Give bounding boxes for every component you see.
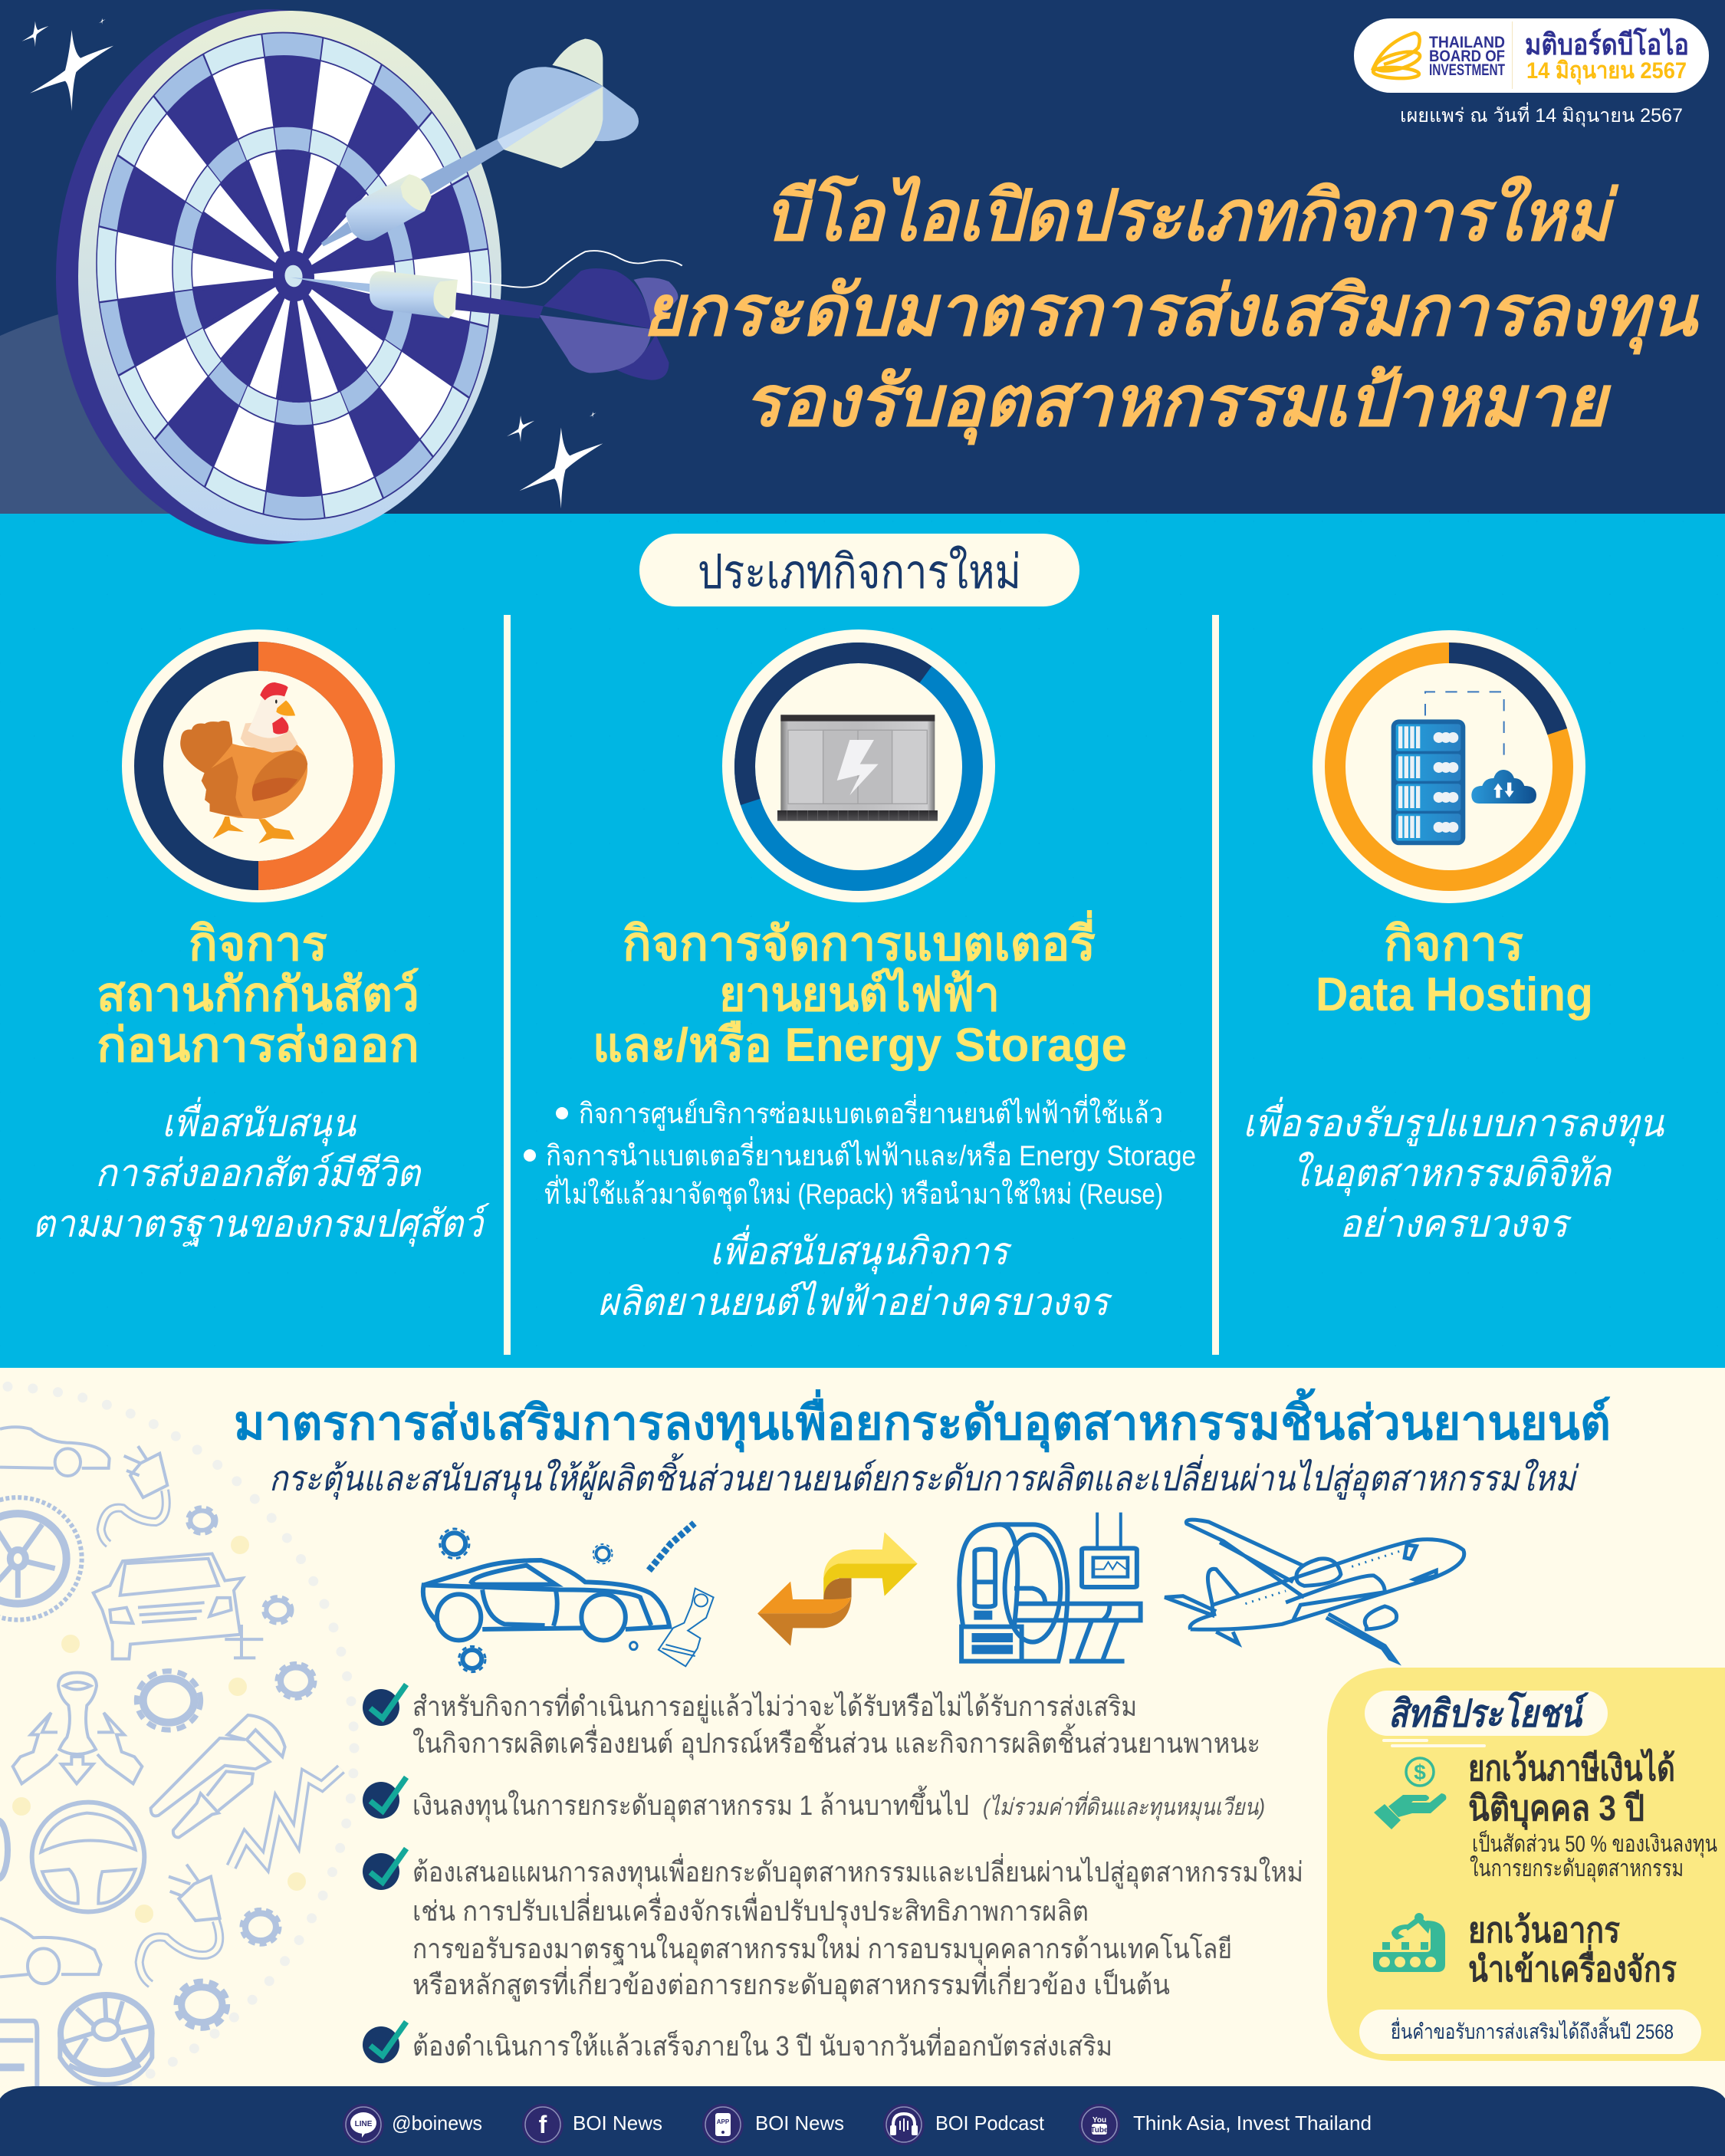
heading: data hosting: [1316, 918, 1593, 1021]
text: data hosting purpose: ในอุตสาหกรรมดิจิทัล: [1292, 1152, 1612, 1197]
social: podcast: [883, 2104, 1045, 2145]
text: animal quarantine purpose: การส่งออกสัตว์มีชีวิต: [95, 1152, 422, 1195]
text: battery purpose: เพื่อสนับสนุนกิจการ: [710, 1224, 1012, 1275]
text: income tax exemption: [1468, 1748, 1717, 1883]
social: LINE: [343, 2104, 482, 2145]
panel: new business types background: [0, 514, 1725, 1368]
icon: check mark: [363, 2022, 406, 2063]
text: animal quarantine purpose: เพื่อสนับสนุน: [162, 1096, 357, 1147]
heading: data hosting: กิจการ: [1384, 918, 1523, 971]
gears: [190, 1510, 213, 1530]
text: BOI resolution title: มติบอร์ดบีโอไอ: [1525, 27, 1689, 61]
icon: lower dart: [291, 251, 682, 380]
icon: check mark: [363, 1777, 406, 1819]
social: app: APP: [717, 2118, 730, 2125]
heading: data hosting: Data Hosting: [1316, 968, 1593, 1021]
social: YouTube: [1079, 2104, 1372, 2145]
illustration: dartboard: [56, 9, 501, 544]
text: battery purpose: ผลิตยานยนต์ไฟฟ้าอย่างครบวงจร: [598, 1280, 1112, 1323]
text: income tax exemption: ยกเว้นภาษีเงินได้: [1468, 1748, 1675, 1788]
text: battery activities: [524, 1093, 1196, 1211]
top car: [0, 1427, 110, 1468]
lower car: [0, 1918, 101, 1977]
plug 2: [169, 1865, 220, 1921]
item: minimum investment: [363, 1777, 1265, 1822]
tire: [0, 1497, 82, 1620]
icon: chicken in ring: [122, 629, 395, 902]
heading pill: benefits: [1365, 1691, 1608, 1747]
item: upgrade plan: การขอรับรองมาตรฐานในอุตสาหกรรมใหม่ การอบรมบุคคลากรด้านเทคโนโลยี: [412, 1933, 1232, 1966]
text: resolution date: 14 มิถุนายน 2567: [1526, 58, 1687, 85]
heading: EV battery management: และ/หรือ Energy Storage: [593, 1019, 1127, 1072]
item: existing businesses: [363, 1684, 1260, 1760]
text: data hosting purpose: อย่างครบวงจร: [1339, 1202, 1572, 1245]
icon: upper dart: [321, 38, 639, 246]
social: LINE: @boinews: [392, 2112, 482, 2135]
social: YouTube: Think Asia, Invest Thailand: [1133, 2112, 1372, 2135]
icon: robot arm conveyor: [1373, 1913, 1445, 1972]
checklist: eligibility conditions: [363, 1684, 1303, 2063]
text: Thailand Board of Investment: THAILAND: [1429, 34, 1505, 51]
item: upgrade plan: [363, 1849, 1303, 2002]
heading: animal quarantine: กิจการ: [189, 918, 327, 971]
footer: social media bar: [0, 2086, 1725, 2156]
steering wheel: [32, 1803, 144, 1912]
heading pill: new business types: ประเภทกิจการใหม่: [698, 545, 1021, 599]
icon: battery in ring: [715, 623, 1002, 910]
social: Facebook: BOI News: [573, 2112, 662, 2135]
icon: car and parts: [423, 1523, 714, 1672]
plug: [124, 1446, 167, 1497]
social: Facebook: [522, 2104, 662, 2145]
item: upgrade plan: ต้องเสนอแผนการลงทุนเพื่อยกระดับอุตสาหกรรมและเปลี่ยนผ่านไปสู่อุตสาหกรรมใหม่: [412, 1853, 1303, 1889]
heading: animal quarantine: สถานกักกันสัตว์: [97, 968, 419, 1021]
front car: [94, 1553, 243, 1659]
item: upgrade plan: หรือหลักสูตรที่เกี่ยวข้องต่อการยกระดับอุตสาหกรรมที่เกี่ยวข้อง เป็นต้น: [412, 1966, 1170, 2002]
social: LINE: LINE: [355, 2120, 373, 2128]
logo: BOI badge: [1354, 18, 1709, 93]
text: measures subtitle: กระตุ้นและสนับสนุนให้ผู้ผลิตชิ้นส่วนยานยนต์ยกระดับการผลิตและเปลี่ยนผ่านไปสู่อุตสาหกรรมใหม่: [269, 1453, 1579, 1500]
social: YouTube: You: [1092, 2116, 1106, 2125]
text: publish date: เผยแพร่ ณ วันที่ 14 มิถุนายน 2567: [1400, 102, 1683, 127]
illustration: car to medical and aviation transition: [423, 1513, 1464, 1672]
item: minimum investment: (ไม่รวมค่าที่ดินและทุนหมุนเวียน): [983, 1791, 1265, 1821]
icon: hand with coin: $: [1414, 1760, 1426, 1784]
heading: EV battery management: ยานยนต์ไฟฟ้า: [719, 967, 1000, 1021]
social: app: BOI News: [755, 2112, 844, 2135]
item: upgrade plan: เช่น การปรับเปลี่ยนเครื่องจักรเพื่อปรับปรุงประสิทธิภาพการผลิต: [412, 1892, 1089, 1928]
icon: sparkle stars: [21, 18, 603, 508]
icon: medical scanner: [959, 1513, 1141, 1661]
heading: animal quarantine: [97, 918, 419, 1072]
social: podcast: BOI Podcast: [935, 2112, 1045, 2135]
icon: server and cloud in ring: [1313, 630, 1585, 903]
heading: automotive parts measures: มาตรการส่งเสริมการลงทุนเพื่อยกระดับอุตสาหกรรมชิ้นส่วนยานยนต์: [234, 1388, 1611, 1452]
heading pill: benefits: สิทธิประโยชน์: [1388, 1691, 1589, 1735]
alloy wheel: [61, 1995, 152, 2071]
text: Thailand Board of Investment: INVESTMENT: [1429, 61, 1505, 79]
text: battery activities: กิจการนำแบตเตอรี่ยานยนต์ไฟฟ้าและ/หรือ Energy Storage: [546, 1136, 1196, 1172]
panel: animal quarantine: [32, 629, 490, 1247]
text: import duty exemption: นำเข้าเครื่องจักร: [1468, 1944, 1677, 1989]
panel: benefits: [1327, 1668, 1725, 2061]
social: YouTube: Tube: [1090, 2126, 1109, 2135]
pill: application deadline: ยื่นคำขอรับการส่งเสริมได้ถึงสิ้นปี 2568: [1391, 2016, 1674, 2043]
battery: [0, 2021, 37, 2087]
panel: automotive measures background: [0, 1368, 1725, 2089]
gear shifter: [58, 1673, 97, 1754]
title: รองรับอุตสาหกรรมเป้าหมาย: [744, 363, 1612, 445]
panel: EV battery management: [524, 623, 1196, 1323]
text: battery purpose: [598, 1224, 1112, 1323]
text: Thailand Board of Investment: BOARD OF: [1429, 48, 1505, 65]
icon: check mark: [363, 1684, 406, 1726]
decorative automotive icon background: [0, 1386, 354, 2110]
item: existing businesses: สำหรับกิจการที่ดำเนินการอยู่แล้วไม่ว่าจะได้รับหรือไม่ได้รับการส่งเสริม: [412, 1688, 1137, 1724]
header background: [0, 0, 1725, 514]
text: import duty exemption: [1468, 1910, 1677, 1989]
icon: hand with coin: [1374, 1758, 1446, 1829]
text: battery activities: ที่ไม่ใช้แล้วมาจัดชุดใหม่ (Repack) หรือนำมาใช้ใหม่ (Reuse): [544, 1174, 1163, 1211]
social: Facebook: f: [539, 2111, 547, 2138]
text: import duty exemption: ยกเว้นอากร: [1468, 1910, 1620, 1950]
text: animal quarantine purpose: [32, 1096, 490, 1247]
text: income tax exemption: นิติบุคคล 3 ปี: [1468, 1788, 1644, 1830]
icon: BOI butterfly: [1372, 33, 1422, 80]
item: existing businesses: ในกิจการผลิตเครื่องยนต์ อุปกรณ์หรือชิ้นส่วน และกิจการผลิตชิ้นส่วนยานพาหนะ: [412, 1723, 1260, 1760]
partial gear: [0, 1820, 8, 1879]
panel: data hosting: [1243, 630, 1665, 1245]
title: ยกระดับมาตรการส่งเสริมการลงทุน: [642, 272, 1700, 355]
wrench: [151, 1715, 285, 1816]
heading: EV battery management: กิจการจัดการแบตเตอรี่: [623, 910, 1096, 971]
text: battery activities: กิจการศูนย์บริการซ่อมแบตเตอรี่ยานยนต์ไฟฟ้าที่ใช้แล้ว: [579, 1093, 1163, 1131]
icon: airplane: [1165, 1520, 1464, 1661]
heading: EV battery management: [593, 910, 1127, 1072]
text: data hosting purpose: เพื่อรองรับรูปแบบการลงทุน: [1243, 1096, 1665, 1147]
heading pill: new business types: [639, 534, 1079, 606]
item: minimum investment: เงินลงทุนในการยกระดับอุตสาหกรรม 1 ล้านบาทขึ้นไป: [412, 1785, 969, 1822]
icon: check mark: [363, 1849, 406, 1890]
item: completion deadline: [363, 2022, 1112, 2063]
social: app: [702, 2104, 844, 2145]
text: data hosting purpose: [1243, 1096, 1665, 1245]
text: animal quarantine purpose: ตามมาตรฐานของกรมปศุสัตว์: [32, 1202, 490, 1247]
text: Thailand Board of Investment: [1429, 34, 1505, 79]
pill: application deadline: [1359, 2010, 1701, 2054]
icon: swap arrows: [757, 1532, 918, 1646]
crankshaft: [232, 1769, 341, 1867]
background hill: [0, 311, 184, 514]
item: completion deadline: ต้องดำเนินการให้แล้วเสร็จภายใน 3 ปี นับจากวันที่ออกบัตรส่งเสริม: [412, 2027, 1112, 2062]
heading: animal quarantine: ก่อนการส่งออก: [97, 1019, 419, 1072]
title: [642, 174, 1700, 445]
title: บีโอไอเปิดประเภทกิจการใหม่: [764, 174, 1619, 255]
